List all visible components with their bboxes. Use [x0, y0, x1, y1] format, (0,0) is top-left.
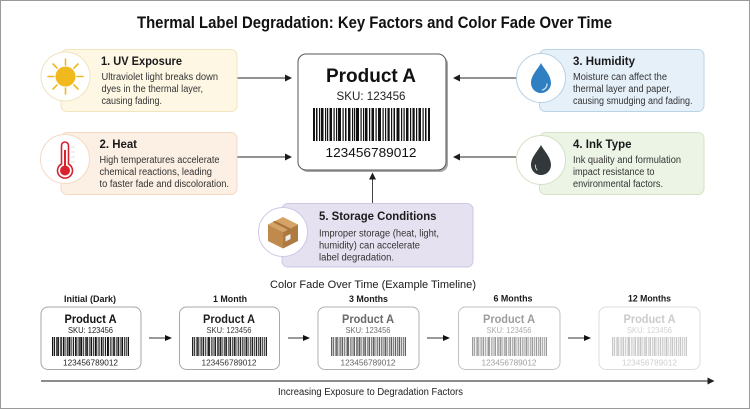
panel: main product label: SKU: 123456 [336, 91, 406, 103]
panel: heat: chemical reactions, leading [100, 167, 212, 178]
panel: UV exposure: dyes in the thermal layer, [102, 84, 203, 95]
arrow: initial to 1 month [149, 335, 172, 341]
timeline stage: initial: Product A [64, 314, 116, 326]
panel: ink type: 4. Ink Type [573, 137, 632, 151]
timeline stage: 12 months: Product A [624, 314, 676, 326]
panel: humidity: causing smudging and fading. [573, 96, 692, 107]
panel: ink type: Ink quality and formulation [573, 155, 681, 166]
timeline stage: 3 months [318, 294, 419, 370]
panel: main product label: Product A [326, 65, 416, 87]
panel: UV exposure: causing fading. [102, 96, 162, 107]
timeline stage: 3 months: 3 Months [349, 294, 388, 305]
arrow: storage to label [369, 172, 376, 204]
axis caption: Increasing Exposure to Degradation Factors [278, 387, 463, 398]
panel: storage conditions: humidity) can accelerate [319, 240, 420, 252]
timeline stage: initial: SKU: 123456 [68, 326, 114, 335]
panel: heat: 2. Heat [100, 137, 137, 151]
arrow: 3 months to 6 months [427, 335, 450, 341]
timeline stage: 6 months: 6 Months [494, 294, 532, 304]
timeline stage: 6 months [458, 294, 560, 370]
timeline stage: 1 month: 123456789012 [202, 358, 257, 368]
timeline stage: 12 months: SKU: 123456 [627, 326, 673, 335]
arrow: heat to label [237, 154, 292, 160]
panel: ink type [516, 132, 704, 194]
title: Thermal Label Degradation: Key Factors and Color Fade Over Time [137, 13, 612, 32]
icon: ink drop [516, 136, 566, 184]
panel: ink type: impact resistance to [573, 167, 655, 178]
timeline stage: 1 month [180, 294, 280, 370]
arrow: humidity to label [453, 74, 516, 82]
barcode [313, 108, 430, 141]
panel: storage conditions [258, 204, 473, 267]
timeline stage: 12 months: 12 Months [628, 294, 671, 304]
timeline stage: initial: 123456789012 [63, 358, 118, 368]
icon: thermometer [40, 134, 90, 184]
panel: humidity: Moisture can affect the [573, 72, 667, 83]
panel: main product label [298, 54, 448, 172]
panel: UV exposure [41, 50, 237, 112]
panel: heat [40, 132, 237, 194]
timeline stage: 1 month: SKU: 123456 [206, 326, 252, 335]
panel: heat: to faster fade and discoloration. [100, 179, 229, 190]
timeline stage: initial: Initial (Dark) [64, 294, 116, 305]
panel: humidity: thermal layer and paper, [573, 84, 672, 95]
panel: storage conditions: 5. Storage Conditions [319, 209, 437, 223]
icon: sun [41, 52, 90, 101]
arrow: UV exposure to label [237, 74, 292, 82]
timeline stage: 3 months: 123456789012 [340, 358, 396, 368]
icon: water drop [516, 54, 566, 102]
timeline stage: initial [41, 294, 141, 370]
timeline stage: 3 months: SKU: 123456 [346, 326, 391, 335]
panel: ink type: environmental factors. [573, 179, 663, 190]
panel: heat: High temperatures accelerate [100, 155, 220, 166]
panel: storage conditions: label degradation. [319, 252, 394, 264]
timeline stage: 3 months: Product A [342, 314, 394, 326]
panel: humidity: 3. Humidity [573, 54, 635, 68]
arrow: increasing exposure axis [41, 378, 714, 384]
arrow: ink type to label [453, 154, 516, 160]
timeline stage: 6 months: Product A [483, 314, 535, 326]
panel: storage conditions: Improper storage (heat, light, [319, 228, 439, 240]
timeline stage: 12 months: 123456789012 [622, 358, 677, 368]
panel: UV exposure: Ultraviolet light breaks down [102, 72, 218, 83]
panel: UV exposure: 1. UV Exposure [101, 54, 182, 68]
icon: cardboard box [258, 208, 308, 256]
arrow: 1 month to 3 months [288, 335, 310, 341]
heading: color fade timeline: Color Fade Over Time (Example Timeline) [270, 279, 476, 291]
timeline stage: 1 month: 1 Month [213, 294, 247, 305]
panel: humidity [516, 50, 704, 112]
arrow: 6 months to 12 months [568, 335, 591, 341]
timeline stage: 6 months: SKU: 123456 [486, 326, 532, 335]
timeline stage: 6 months: 123456789012 [482, 358, 537, 368]
timeline stage: 12 months [599, 294, 700, 370]
panel: main product label: 123456789012 [326, 145, 416, 160]
timeline stage: 1 month: Product A [203, 314, 255, 326]
